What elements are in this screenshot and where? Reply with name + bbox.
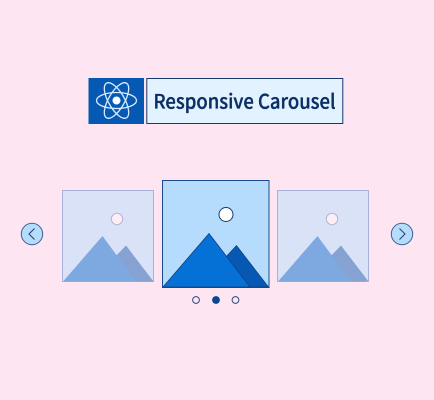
title box: [147, 78, 343, 124]
title: Responsive Carousel: [154, 86, 336, 114]
pagination dots: [193, 296, 239, 304]
icon: atom logo: [88, 78, 144, 124]
slide: left image placeholder: [62, 190, 154, 282]
button: previous arrow: [21, 223, 43, 245]
slide: right image placeholder: [278, 190, 368, 282]
button: next arrow: [391, 223, 413, 245]
slide: centre image placeholder: [162, 180, 269, 288]
